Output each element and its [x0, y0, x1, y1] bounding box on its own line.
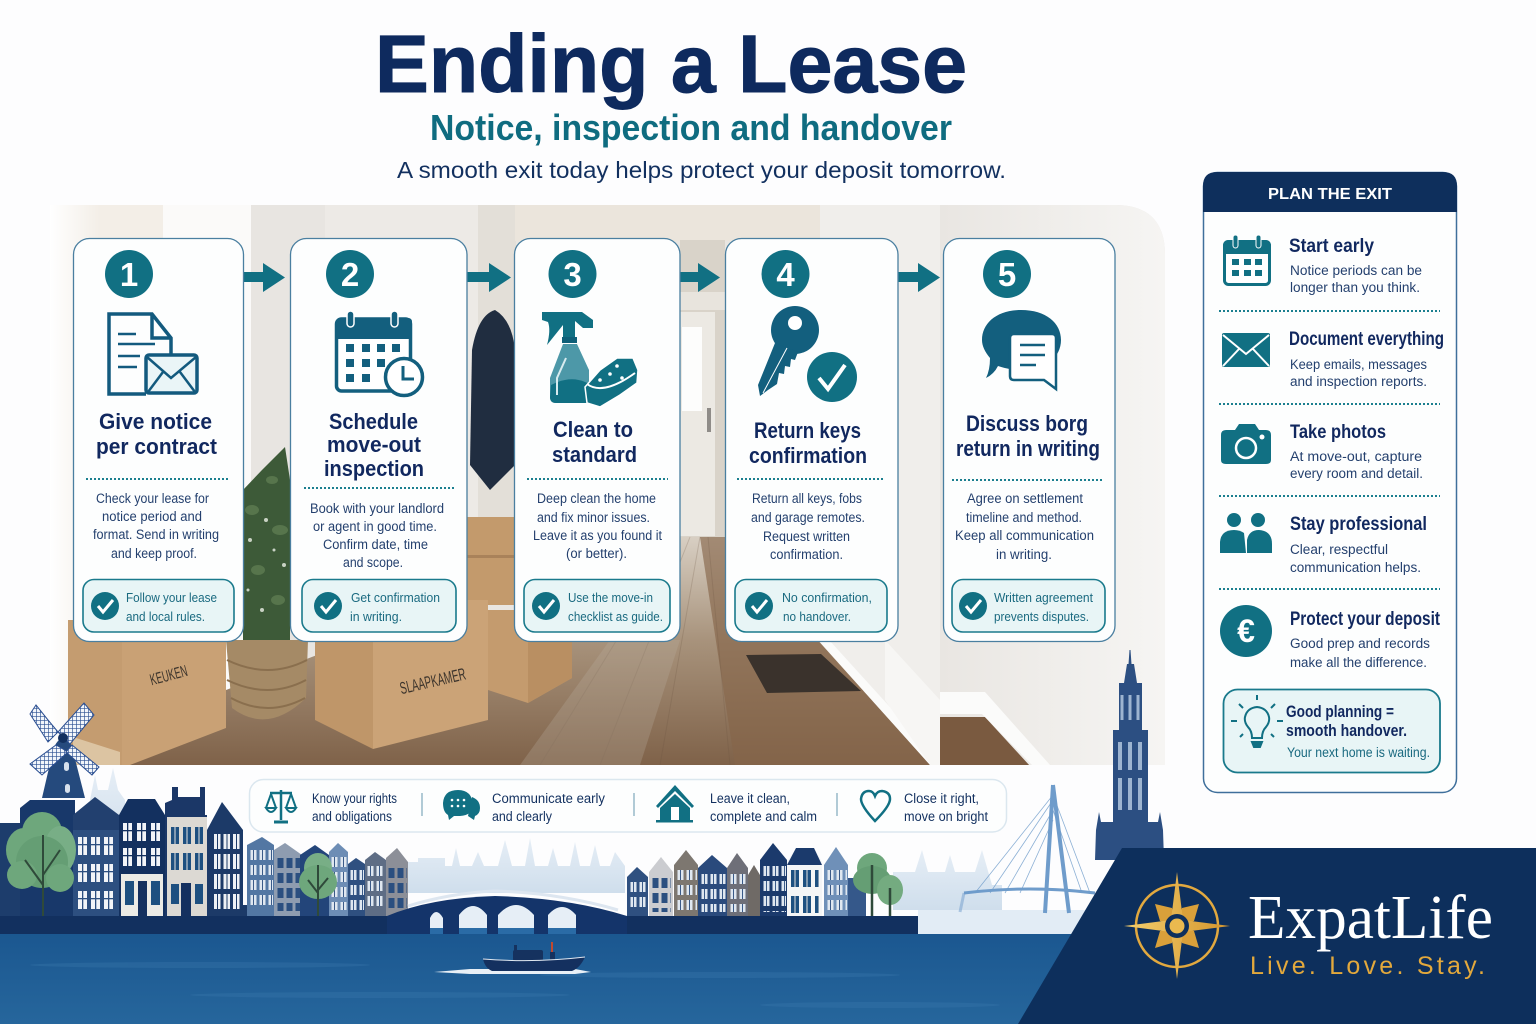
tip: take photos: At move-out, capture	[1290, 449, 1422, 464]
body text: and fix minor issues.	[537, 510, 650, 525]
body text: Deep clean the home	[537, 491, 656, 506]
step number 3	[548, 250, 596, 298]
house D	[207, 802, 243, 916]
icon: euro coin	[1220, 605, 1272, 657]
step number 1	[105, 250, 153, 298]
callout: checklist as guide.	[568, 609, 663, 624]
tip: start early: longer than you think.	[1290, 280, 1420, 295]
box: SLAAPKAMER: SLAAPKAMER	[398, 665, 468, 698]
arrow 3 to 4	[680, 263, 720, 292]
heading: Schedule	[329, 409, 418, 434]
body text: confirmation.	[770, 547, 843, 562]
icon: document and envelope	[109, 314, 197, 394]
heading	[324, 409, 424, 481]
arrow 1 to 2	[243, 263, 285, 292]
tree left large	[6, 812, 76, 916]
tip: start early	[1223, 235, 1422, 295]
tip: document everything: Document everything	[1289, 329, 1444, 350]
icon: chat bubbles	[443, 790, 480, 820]
box: KEUKEN	[68, 620, 226, 766]
tree left small	[299, 853, 337, 916]
heading	[749, 418, 867, 468]
callout: Follow your lease	[126, 590, 217, 605]
heading: move-out	[327, 432, 422, 457]
heading: inspection	[324, 456, 424, 481]
panel: step 4 return keys	[726, 238, 898, 642]
heading	[96, 409, 218, 459]
callout: prevents disputes.	[994, 609, 1089, 624]
faded background skyline	[90, 768, 1002, 910]
tagline: A smooth exit today helps protect your deposit tomorrow.	[397, 157, 1006, 183]
pale far water	[918, 910, 1093, 934]
callout: Get confirmation	[351, 590, 440, 605]
tip: take photos: Take photos	[1290, 422, 1386, 443]
photo: empty hallway with moving boxes	[50, 205, 1165, 766]
callout: Use the move-in	[568, 590, 653, 605]
value: communicate: and clearly	[492, 809, 552, 824]
callout	[302, 580, 456, 632]
heading: return in writing	[956, 436, 1100, 461]
body text: Check your lease for	[96, 491, 209, 506]
arrow 4 to 5	[898, 263, 940, 292]
callout: Written agreement	[994, 590, 1093, 605]
step number 2: 2	[341, 256, 359, 293]
icon: spray bottle and sponge	[542, 312, 638, 407]
value: clean	[710, 791, 817, 824]
step number 5: 5	[998, 256, 1016, 293]
body text: Leave it as you found it	[533, 528, 662, 543]
logo wordmark: ExpatLife	[1248, 884, 1493, 952]
tip: take photos	[1221, 422, 1423, 481]
value: communicate: Communicate early	[492, 791, 605, 806]
house B	[119, 799, 165, 916]
panel: step 1 give notice	[74, 238, 244, 642]
box: SLAAPKAMER	[315, 600, 488, 749]
quay	[0, 916, 918, 934]
heading: Clean to	[553, 417, 633, 442]
callout	[952, 580, 1105, 632]
body text	[751, 491, 865, 562]
panel: step 5 discuss borg	[944, 238, 1115, 642]
body text: and keep proof.	[111, 546, 197, 561]
sidebar header	[1203, 172, 1457, 212]
church tower	[1095, 650, 1164, 860]
value: close right: Close it right,	[904, 791, 979, 806]
callout	[524, 580, 670, 632]
plant	[243, 447, 290, 640]
tip: protect your deposit: Protect your deposit	[1290, 609, 1441, 630]
value: rights	[312, 791, 397, 824]
tip: document everything: Keep emails, messages	[1290, 357, 1427, 372]
icon: calendar	[1223, 235, 1271, 284]
body text: and garage remotes.	[751, 510, 865, 525]
heading: per contract	[96, 434, 218, 459]
icon: euro coin: €	[1237, 613, 1255, 649]
heading: Return keys	[754, 418, 861, 443]
body text	[955, 491, 1094, 562]
heading	[552, 417, 637, 467]
value: close right: move on bright	[904, 809, 988, 824]
heading: standard	[552, 442, 637, 467]
step number 4: 4	[776, 256, 795, 293]
logo: compass	[1124, 872, 1230, 979]
callout: good planning: Good planning =	[1286, 702, 1394, 721]
value: rights: and obligations	[312, 809, 392, 824]
house A	[73, 797, 119, 916]
house C	[165, 787, 207, 916]
callout: good planning: smooth handover.	[1286, 721, 1407, 740]
title: Ending a Lease	[375, 19, 967, 110]
sidebar header: PLAN THE EXIT	[1268, 186, 1392, 203]
callout: No confirmation,	[782, 590, 872, 605]
tip: start early: Start early	[1289, 236, 1374, 257]
tip: take photos: every room and detail.	[1290, 466, 1423, 481]
panel: step 2 schedule inspection	[290, 238, 467, 642]
subtitle: Notice, inspection and handover	[430, 107, 952, 148]
body text: in writing.	[996, 547, 1052, 562]
trees right	[853, 853, 903, 916]
tip: stay professional: Clear, respectful	[1290, 542, 1388, 557]
body text: format. Send in writing	[93, 527, 219, 542]
step number 3: 3	[563, 256, 582, 293]
arrow 2 to 3	[467, 263, 511, 292]
callout	[83, 580, 234, 632]
heading: Discuss borg	[966, 411, 1088, 436]
box: KEUKEN: KEUKEN	[148, 663, 189, 689]
tip: stay professional: Stay professional	[1290, 514, 1427, 535]
body text	[310, 501, 444, 570]
icon: key and check	[758, 306, 857, 402]
tip: document everything	[1222, 329, 1444, 389]
value: communicate	[492, 791, 605, 824]
step number 2	[326, 250, 374, 298]
callout: and local rules.	[126, 609, 205, 624]
logo panel	[1018, 848, 1536, 1024]
callout: no handover.	[783, 609, 851, 624]
windmill	[30, 703, 99, 798]
heading: Give notice	[99, 409, 212, 434]
callout: good planning	[1224, 690, 1440, 772]
tip: protect your deposit: Good prep and records	[1290, 636, 1430, 651]
body text: Keep all communication	[955, 528, 1094, 543]
canal houses left	[0, 703, 408, 916]
arched bridge	[387, 891, 627, 934]
canal houses right	[627, 843, 866, 916]
water	[0, 934, 1100, 1024]
panel: plan the exit sidebar	[1203, 172, 1457, 792]
boat	[434, 942, 591, 974]
icon: calendar with clock	[336, 311, 422, 396]
basket	[226, 640, 308, 719]
icon: speech bubble with document	[982, 310, 1061, 389]
tip: document everything: and inspection reports.	[1290, 374, 1427, 389]
value: rights: Know your rights	[312, 791, 397, 806]
heading	[956, 411, 1100, 461]
step number 5	[983, 250, 1031, 298]
step number 1: 1	[120, 256, 138, 293]
body text: notice period and	[102, 509, 202, 524]
body text: timeline and method.	[966, 510, 1082, 525]
callout: good planning: Your next home is waiting.	[1287, 745, 1430, 760]
callout: in writing.	[350, 609, 402, 624]
body text: Confirm date, time	[323, 537, 428, 552]
body text	[533, 491, 662, 561]
panel: step 3 clean	[514, 238, 680, 642]
body text	[93, 491, 219, 561]
tip: stay professional: communication helps.	[1290, 560, 1421, 575]
body text: Agree on settlement	[967, 491, 1083, 506]
icon: heart	[861, 791, 890, 821]
body text: Return all keys, fobs	[752, 491, 862, 506]
icon: house	[656, 785, 694, 822]
value: clean: complete and calm	[710, 809, 817, 824]
tip: stay professional	[1220, 513, 1427, 575]
icon: camera	[1221, 424, 1271, 464]
cable-stayed bridge	[960, 785, 1095, 913]
icon: light bulb	[1231, 695, 1283, 747]
body text: Request written	[763, 529, 850, 544]
body text: Book with your landlord	[310, 501, 444, 516]
icon: two people	[1220, 513, 1272, 553]
tip: start early: Notice periods can be	[1290, 263, 1422, 278]
step number 4	[762, 250, 810, 298]
body text: or agent in good time.	[313, 519, 437, 534]
value: close right	[904, 791, 988, 824]
logo tagline: Live. Love. Stay.	[1250, 952, 1485, 980]
values strip	[250, 780, 1006, 832]
value: clean: Leave it clean,	[710, 791, 790, 806]
heading: confirmation	[749, 443, 867, 468]
icon: envelope	[1222, 333, 1270, 367]
body text: and scope.	[343, 555, 403, 570]
tip: protect your deposit: make all the difference.	[1290, 655, 1427, 670]
tip: protect your deposit	[1220, 605, 1441, 670]
icon: scales	[266, 790, 296, 822]
body text: (or better).	[566, 546, 627, 561]
callout	[735, 580, 887, 632]
